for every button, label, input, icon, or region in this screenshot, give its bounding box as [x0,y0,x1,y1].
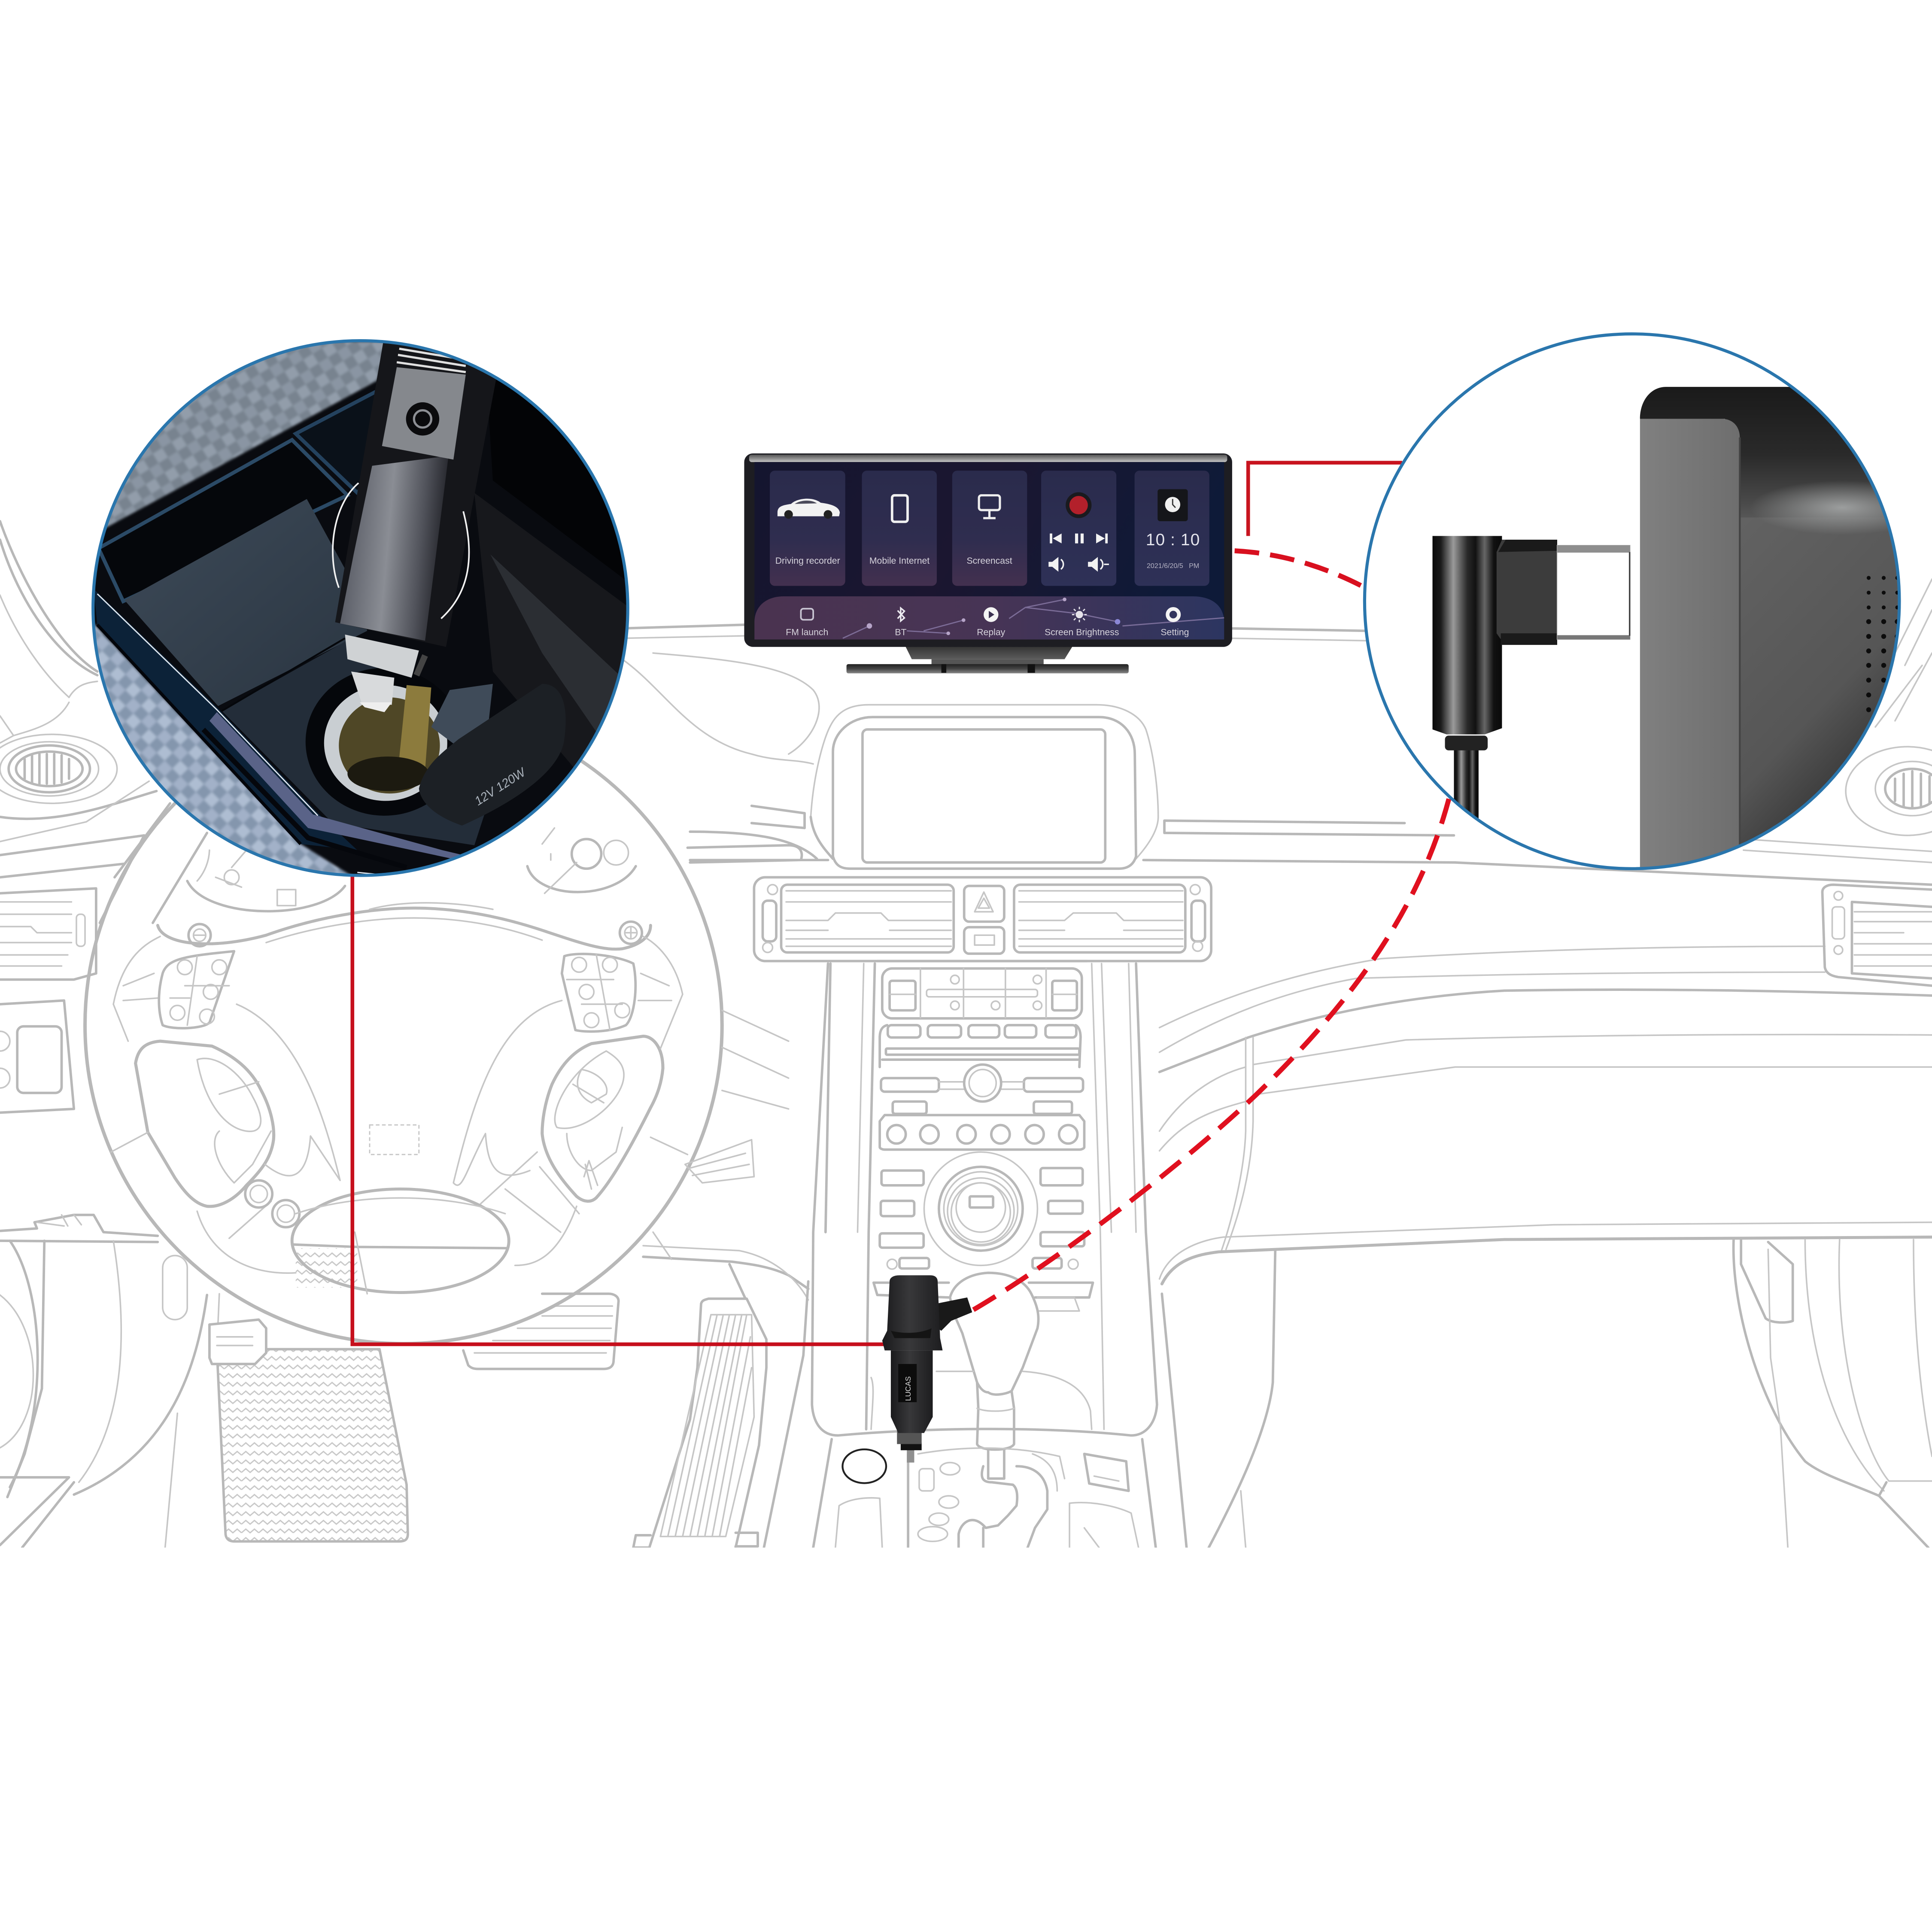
black circle marker near gear lever [842,1449,886,1483]
red solid line: lighter socket callout to charger [352,872,887,1344]
icon: FM radio [801,609,813,620]
bottom dock [754,596,1224,639]
brake pedal with tread [210,1248,408,1541]
card: clock [1135,471,1209,586]
instrument gauges behind wheel [187,828,636,911]
callout circle: cigarette lighter socket photo: 12V 120W [472,765,529,808]
center screen bezel [811,705,1158,869]
bottom dock: Screen Brightness [1045,627,1119,637]
device stand [847,643,1129,673]
USB-C metal tip [1557,545,1630,639]
bottom dock: Setting [1160,627,1189,637]
icon: monitor cast [979,495,1000,518]
Type-C cable [1454,745,1479,832]
bottom dock: BT [895,627,906,637]
icon: red record disc [1066,492,1091,518]
gear selector base [813,1439,1156,1548]
decorative network lines [843,599,1224,638]
car charger plug: LUCAS [904,1376,912,1401]
side cable outlet [933,1297,972,1331]
speaker grille dots [1866,576,1900,712]
top highlight strip [749,455,1227,462]
card: Screencast: Screencast [966,556,1012,566]
red dashed cable: charger to Type-C connector [973,799,1449,1310]
car charger plug [882,1275,972,1463]
dash-mounted screen device [744,453,1232,673]
gear shifter [871,1273,1092,1479]
car interior line drawing [0,521,1932,1548]
screen side casing [1640,387,1932,882]
right side door and dash [653,579,1932,1548]
icon: brightness [1075,611,1083,618]
bottom dock: Replay [977,627,1005,637]
card: Mobile Internet [862,471,937,586]
left lower footwell [0,1215,207,1548]
charger body and tip [907,1449,914,1463]
icon: settings gear [1168,609,1179,620]
icons: playback controls [1050,534,1108,544]
device body [744,453,1232,647]
left windshield pillar and dash lines [0,521,207,923]
charger label [898,1364,917,1402]
connector block [1497,540,1557,644]
callout circle: Type-C connector and screen side [1364,334,1932,882]
red solid line: screen to Type-C callout [1248,463,1402,536]
card: Mobile Internet: Mobile Internet [869,556,930,566]
L-shaped connector barrel [1433,536,1502,734]
icons: volume [1048,557,1109,572]
card: Driving recorder [770,471,845,586]
left dash vents and switches [0,734,117,1113]
steering wheel [85,707,722,1344]
card: clock: 2021/6/20/5 PM [1147,562,1199,570]
top dash rails [622,579,1932,885]
card: clock: 10 : 10 [1146,531,1200,549]
screen [754,462,1224,639]
charger head [882,1275,942,1350]
callout circle: cigarette lighter socket photo [86,333,641,887]
card: music player [1041,471,1116,586]
icon: car [778,498,840,519]
center console stack [812,961,1157,1435]
icon: phone [892,495,908,522]
card: Screencast [952,471,1027,586]
card: Driving recorder: Driving recorder [775,556,840,566]
middle pedal [463,1294,619,1369]
center air vents panel [754,877,1211,961]
red dashed cable: screen to Type-C callout [1235,551,1363,586]
icon: replay [984,607,998,622]
cable collar [1445,735,1488,750]
icon: bluetooth [898,608,905,621]
icon: clock [1157,489,1188,521]
accelerator pedal [633,1245,808,1548]
bottom dock: FM launch [786,627,828,637]
